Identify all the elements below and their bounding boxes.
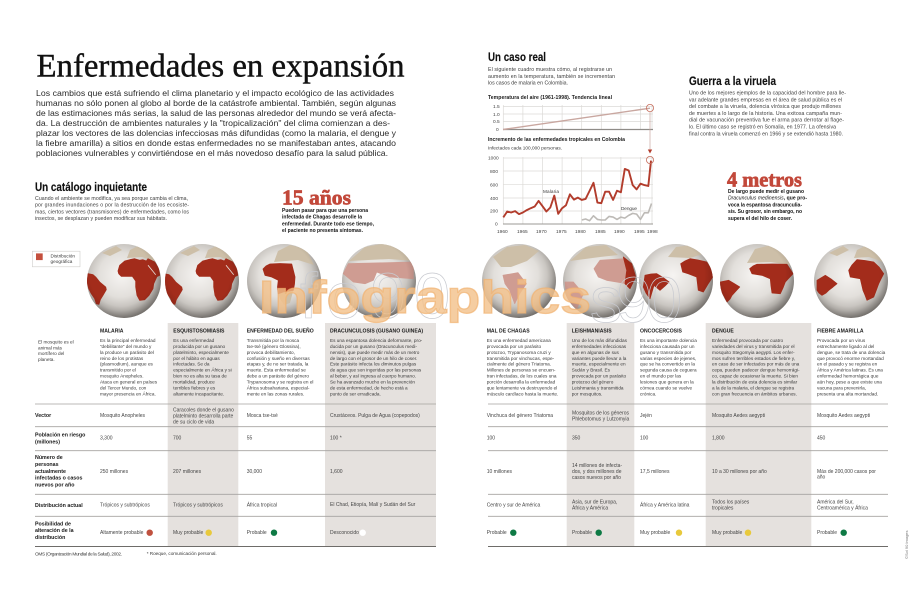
callout: 15 años: infectada de Chagas desarrolle la [282, 215, 362, 221]
row: distribución actual: Centroamérica y África [817, 504, 868, 512]
column: enfermedad del sueño: debe a un parásito del género [247, 374, 309, 379]
column: fiebre amarilla: vacuna para prevenirla, [817, 385, 866, 390]
column: dengue: DENGUE [712, 328, 734, 334]
column: mal de chagas [487, 328, 558, 396]
globe: dengue [720, 244, 794, 318]
column: esquistosomiasis [173, 328, 232, 396]
row: personas infectadas: año [817, 475, 826, 481]
text: caso real description: aumento en la temperatura, también se incrementan [488, 74, 615, 80]
column: mal de chagas: músculo cardíaco hasta la muerte. [487, 391, 558, 396]
chart: malaria y dengue: 1000 [488, 156, 499, 162]
chart: malaria y dengue: 1980 [575, 229, 586, 235]
column: enfermedad del sueño [247, 328, 314, 396]
column: enfermedad del sueño: Trypanosoma y se registra en el [247, 380, 313, 385]
row: personas infectadas [100, 463, 876, 481]
column: dracunculosis: de agua que son ingeridas por las personas [330, 368, 422, 373]
column: mal de chagas: transmitida por vinchucas, espe- [487, 356, 555, 361]
globe: leishmaniasis [563, 244, 637, 318]
callout: 4 metros: Dracunculus medinensis, que pro- [728, 196, 807, 202]
intro paragraph [36, 88, 397, 158]
column: malaria: MALARIA [100, 328, 124, 334]
row: personas infectadas: 30,000 [247, 469, 262, 475]
row: vector [100, 408, 870, 426]
column: malaria: mayor presencia en África. [100, 390, 156, 396]
chart: malaria y dengue: 1985 [595, 229, 606, 235]
arrow: temperature to disease peak [646, 104, 654, 164]
column: mal de chagas: Millones de personas se encuen- [487, 368, 556, 373]
row: posibilidad de alteración: Altamente probable [100, 530, 144, 536]
column: malaria: “debilitante” del mundo y [100, 344, 152, 349]
intro paragraph: poblaciones vulnerables y convirtiéndose en el más novedoso desafío para la salud pública. [36, 148, 388, 158]
callout: 15 años [282, 186, 375, 234]
row labels: distribución [35, 535, 65, 541]
row: posibilidad de alteración: Probable [247, 530, 267, 536]
column: note [38, 339, 74, 362]
text: viruela description: lo. El último caso se registró en Somalia, en 1977. La ofensiva [689, 124, 836, 130]
column: leishmaniasis: muerte, especialmente en [572, 362, 626, 367]
column: leishmaniasis: Sudán y Brasil. Es [572, 368, 611, 373]
column: malaria [100, 328, 158, 396]
column: dengue: a la de la malaria, el dengue se registra [712, 385, 794, 390]
chart: malaria y dengue [488, 156, 658, 235]
column: oncocercosis: Es una importante dolencia [640, 338, 697, 343]
column: malaria: Es la principal enfermedad [100, 338, 156, 343]
column: malaria: la produce un parásito del [100, 350, 154, 355]
row labels: Población en riesgo [35, 433, 86, 439]
column: oncocercosis: gusano y transmitida por [640, 350, 692, 355]
chart: malaria y dengue: Dengue [621, 206, 637, 211]
column: leishmaniasis: variantes puede llevar a la [572, 356, 627, 361]
chart: temperatura del aire: 1.0 [493, 112, 500, 118]
chart: malaria y dengue: 1975 [556, 229, 567, 235]
row: vector: Mosquito Anopheles [100, 413, 146, 419]
column: mal de chagas: porción desarrolla la enfermedad [487, 380, 556, 385]
text: catalog description: insectos, se desplazan y pueden modificar sus hábitats. [35, 216, 167, 222]
column: oncocercosis: infecciosa causada por un [640, 344, 695, 349]
column: leishmaniasis: Uno de los más difundidas [572, 338, 628, 343]
row: distribución actual: Asia, sur de Europa, [572, 500, 617, 506]
chart: malaria y dengue: 1995 [634, 229, 645, 235]
column: mal de chagas: cialmente del género Triatoma. [487, 362, 551, 367]
column: enfermedad del sueño: etapas y, de no ser tratada, la [247, 362, 309, 367]
column: dengue: Enfermedad provocada por cuatro [712, 338, 784, 343]
globe: esquistosomiasis [163, 244, 239, 318]
row: distribución actual: tropicales [712, 506, 734, 512]
text: viruela description: var adelante grandes empresas en el área de salud pública es el [689, 97, 842, 103]
column: malaria: mosquito Anopheles. [100, 374, 144, 379]
row: vector: Mosquitos de los géneros [572, 410, 629, 416]
chart: temperatura del aire: Temperatura del aire (1961-1998). Tendencia lineal [488, 95, 613, 101]
row labels: (millones) [35, 439, 60, 445]
column: dengue: en caso de ser infectados por más de una [712, 362, 800, 367]
row: población en riesgo: 450 [817, 435, 826, 441]
row: personas infectadas: 207 millones [173, 469, 202, 475]
text: catalog description: mas, ciertos vectores (transmisores) de enfermedades, como los [35, 209, 189, 215]
column: enfermedad del sueño: tse-tsé (género Glossina), [247, 344, 301, 349]
chart: malaria y dengue: 1970 [536, 229, 547, 235]
text: viruela description: dial de vacunación preventiva fue el arma para derrotar al flage- [689, 118, 844, 124]
column: enfermedad del sueño: mente en las zonas rurales. [247, 391, 304, 396]
callout: 4 metros: sis. Su grosor, sin embargo, no [728, 209, 802, 215]
chart: temperatura del aire: 0 [496, 127, 499, 133]
row labels: nuevos por año [35, 483, 75, 489]
column: enfermedad del sueño: muerte. Esta enfermedad se [247, 368, 306, 373]
text: caso real description: los casos de malaria en Colombia. [488, 81, 568, 87]
heading: chart incremento: Incremento de las enfermedades tropicales en Colombia [488, 137, 625, 143]
column: enfermedad del sueño: Transmitida por la mosca [247, 338, 300, 343]
table rules [35, 404, 888, 516]
column: esquistosomiasis: bien no es alta su tasa de [173, 374, 227, 379]
row: personas infectadas: dos, y dos millones de [572, 469, 622, 475]
column: leishmaniasis: enfermedades infecciosas [572, 344, 627, 349]
column: mal de chagas: tran infectadas, de los cuales una [487, 374, 557, 379]
row: vector: Mosca tse-tsé [247, 413, 278, 419]
row: posibilidad de alteración: Muy probable [712, 530, 743, 536]
column: oncocercosis: ONCOCERCOSIS [640, 328, 682, 334]
row: población en riesgo: 100 [640, 435, 649, 441]
row: personas infectadas: 10 a 30 millones por año [712, 469, 767, 475]
chart: temperatura del aire [488, 95, 653, 133]
row: distribución actual: Trópicos y subtrópicos [100, 502, 150, 508]
text: viruela description: final contra la viruela comenzó en 1966 y se extendió hasta 1980. [689, 131, 843, 137]
column: dracunculosis: de esta enfermedad, de hecho está a [330, 385, 408, 390]
row: población en riesgo: 1,800 [712, 435, 725, 441]
legend: distribución geográfica [32, 251, 80, 267]
row: vector: Phlebotomus y Lutzomyia [572, 416, 629, 422]
watermark: fo90 [300, 260, 450, 332]
row labels: Número de [35, 455, 63, 461]
heading: chart incremento [488, 137, 625, 151]
column: dracunculosis: al beber, y así ingresa al cuerpo humano. [330, 374, 416, 379]
column: fiebre amarilla: en el pasado y se registra en [817, 362, 878, 367]
row: posibilidad de alteración: Probable [572, 530, 592, 536]
column: esquistosomiasis: terribles fiebres y es [173, 385, 216, 390]
text: caso real description: El siguiente cuadro muestra cómo, al registrarse un [488, 67, 612, 73]
row: personas infectadas: Más de 200,000 casos por [817, 469, 876, 475]
column: dracunculosis [330, 328, 423, 396]
watermark [259, 260, 682, 336]
intro paragraph: da. La destrucción de ambientes naturales y la "tropicalización" del clima comienzan a des- [36, 118, 390, 128]
row: vector: Crustáceos. Pulga de Agua (copepodos) [330, 413, 420, 419]
column: fiebre amarilla: Provocada por un virus [817, 338, 866, 343]
chart: malaria y dengue: 600 [490, 182, 498, 188]
text: viruela description [689, 90, 846, 137]
column: fiebre amarilla: África y América latinas. Es una [817, 367, 883, 373]
column: mal de chagas: provocada por un parásito [487, 344, 542, 349]
globe: dracunculosis [342, 243, 416, 318]
column: mal de chagas: que lentamente va destruyendo el [487, 385, 557, 390]
chart: temperatura del aire: 1.5 [493, 104, 500, 110]
text: catalog description: por grandes inundaciones o por la destrucción de los ecosiste- [35, 203, 189, 209]
text: viruela description: Uno de los mejores ejemplos de la capacidad del hombre para lle- [689, 90, 846, 96]
row: vector: Jején [640, 413, 652, 419]
callout: 4 metros: supera el del hilo de coser. [728, 216, 793, 222]
column: dracunculosis: Se ha avanzado mucho en la prevención [330, 380, 415, 385]
column: oncocercosis: varias especies de jejenes, [640, 356, 696, 361]
column: dengue: variedades del virus y transmitida por el [712, 344, 795, 349]
column: dengue: mos sufren terribles estados de fiebre y, [712, 356, 795, 361]
globe: enfermedad del sueño [247, 244, 321, 318]
row: vector: platelminto desarrolla parte [173, 414, 234, 420]
column: mal de chagas: protozoo, Trypanosoma cruzi y [487, 350, 551, 355]
column: malaria: reino de los protistas [100, 356, 144, 361]
column: dracunculosis: ducida por un gusano (Dracunculus medi- [330, 344, 417, 349]
callout: 4 metros: voca la espantosa dracunculia- [728, 202, 802, 208]
column: enfermedad del sueño: provoca debilitamiento, [247, 350, 295, 355]
column: oncocercosis: córnea cuando se vuelve [640, 385, 693, 390]
row: vector: Vinchuca del género Triatoma [487, 413, 553, 419]
chart: temperatura del aire: 0.5 [493, 119, 500, 125]
column: note: mortífero del [38, 351, 64, 356]
column: fiebre amarilla: dengue, se trata de una dolencia [817, 350, 886, 355]
row: distribución actual [100, 500, 868, 512]
footnotes [35, 551, 217, 557]
text: catalog description: Cuando el ambiente se modifica, ya sea porque cambia el clima, [35, 196, 188, 202]
column: dengue [712, 328, 800, 396]
column: dengue: cepa, pueden padecer dengue hemorrági- [712, 368, 800, 373]
heading: Guerra a la viruela: Guerra a la viruela [689, 74, 776, 88]
row: distribución actual: Trópicos y subtrópicos [173, 502, 223, 508]
row labels: alteración de la [35, 528, 74, 534]
chart: malaria y dengue: Malaria [543, 189, 559, 194]
chart: malaria y dengue: 1965 [517, 229, 528, 235]
column: leishmaniasis: que en algunas de sus [572, 350, 620, 355]
globe: oncocercosis [639, 244, 713, 318]
callout: 4 metros: De largo puede medir el gusano [728, 189, 804, 195]
legend: distribución geográfica: geográfica [50, 259, 73, 264]
column: fiebre amarilla: presenta una alta mortandad. [817, 391, 878, 396]
column: esquistosomiasis: especialmente en África y si [173, 367, 232, 373]
column: enfermedad del sueño: confusión y sueño en diversas [247, 356, 310, 361]
chart: malaria y dengue: 1960 [497, 229, 508, 235]
column: fiebre amarilla [817, 328, 886, 396]
column: esquistosomiasis: por el hábito en aguas [173, 356, 220, 361]
heading: Un catálogo inquietante: Un catálogo inquietante [35, 180, 147, 194]
row: posibilidad de alteración: Desconocido [330, 530, 359, 536]
chart: malaria y dengue: 0 [495, 222, 498, 228]
callout: 15 años: el paciente no presenta síntomas. [282, 228, 364, 234]
text: viruela description: de muertes a lo largo de la historia. Una exitosa campaña mun- [689, 111, 842, 117]
column: dracunculosis: de largo con el grosor de un hilo de coser. [330, 356, 417, 361]
footnotes: OMS (Organización Mundial de la Salud), 2002. [35, 552, 122, 557]
row: personas infectadas: 250 millones [100, 469, 129, 475]
row: vector: Caracoles donde el gusano [173, 408, 234, 414]
column: enfermedad del sueño: África subsahariana, especial- [247, 384, 310, 390]
row labels: Posibilidad de [35, 522, 71, 528]
column: dracunculosis: Es una espantosa dolencia deformante, pro- [330, 338, 423, 343]
column: leishmaniasis [572, 328, 628, 396]
row: posibilidad de alteración: Muy probable [173, 530, 204, 536]
row: personas infectadas: 10 millones [487, 469, 512, 475]
column: leishmaniasis: por mosquitos. [572, 391, 602, 396]
column: dracunculosis: Este parásito infecta los diminutos pulgas [330, 362, 417, 367]
column: fiebre amarilla: estrechamente ligado al del [817, 344, 874, 349]
chart: malaria y dengue: 1990 [614, 229, 625, 235]
globe: fiebre amarilla [814, 244, 888, 318]
row: población en riesgo: 55 [247, 435, 252, 441]
heading: Un caso real: Un caso real [488, 50, 546, 64]
column: dracunculosis: DRACUNCULOSIS (GUSANO GUINEA) [330, 328, 423, 334]
row labels: Distribución actual [35, 503, 83, 509]
column: oncocercosis: crónica. [640, 391, 656, 396]
row: distribución actual: El Chad, Etiopía, Malí y Sudán del Sur [330, 502, 416, 508]
row: población en riesgo: 700 [173, 435, 182, 441]
column: dengue: mosquito Stegomyia aegypti. Los enfer- [712, 350, 795, 355]
column: oncocercosis [640, 328, 697, 396]
row: posibilidad de alteración: Probable [817, 530, 837, 536]
column: esquistosomiasis: platelminto, especialmente [173, 350, 229, 355]
text: viruela description: del combate a la viruela, dolencia vírósica que produjo millones [689, 104, 841, 110]
row: personas infectadas: casos nuevos por año [572, 475, 621, 481]
column: malaria: (plasmodium), aunque es [100, 362, 154, 367]
chart: malaria y dengue: 800 [490, 169, 498, 175]
row: vector: Mosquito Aedes aegypti [817, 413, 870, 419]
row: posibilidad de alteración: Muy probable [640, 530, 671, 536]
callout: 4 metros [727, 168, 807, 222]
row: posibilidad de alteración: Probable [487, 530, 507, 536]
column: dengue: co, capaz de ocasionar la muerte. Si bien [712, 374, 798, 379]
column: esquistosomiasis: altamente incapacitante. [173, 391, 224, 396]
column: esquistosomiasis: mortalidad, produce [173, 380, 215, 385]
text: catalog description [35, 196, 189, 222]
column: dengue: con gran frecuencia en ámbitos urbanos. [712, 391, 797, 396]
watermark: s90 [590, 264, 682, 336]
row: posibilidad de alteración [100, 530, 847, 536]
column: malaria: Ataca en general en países [100, 380, 158, 385]
row labels: personas [35, 462, 59, 468]
column: leishmaniasis: Leishmania y transmitida [572, 385, 624, 390]
intro paragraph: la fiebre amarilla) a sitios en donde estas enfermedades no se manifestaban antes, atacando [36, 138, 396, 148]
column: malaria: transmitido por el [100, 368, 136, 373]
column: note: El mosquito es el [38, 339, 74, 344]
callout: 15 años: enfermedad. Durante todo ese tiempo, [282, 221, 375, 227]
legend: distribución geográfica: Distribución [50, 253, 75, 258]
row: distribución actual: África y América [572, 504, 608, 512]
shaded table columns [168, 323, 811, 547]
credit: ©Sol 90 Images [904, 530, 909, 559]
column: esquistosomiasis: infectadas. Se da [173, 362, 210, 367]
column: note: animal más [38, 345, 63, 350]
title: Enfermedades en expansión [36, 48, 404, 84]
heading: chart incremento: Infectados cada 100,000 personas. [488, 146, 562, 151]
text: caso real description [488, 67, 615, 87]
chart: malaria y dengue: 200 [490, 208, 498, 214]
column: fiebre amarilla: enfermedad hemorrágica que [817, 374, 879, 379]
row: vector: de su ciclo de vida [173, 420, 214, 426]
column: enfermedad del sueño: ENFERMEDAD DEL SUEÑO [247, 328, 314, 334]
column: esquistosomiasis: ESQUISTOSOMIASIS [173, 328, 225, 334]
callout: 15 años: 15 años [282, 186, 351, 210]
globe: malaria [87, 244, 161, 318]
row: personas infectadas: 1,600 [330, 469, 343, 475]
column: oncocercosis: en el mundo por las [640, 374, 682, 379]
column: oncocercosis: segunda causa de ceguera [640, 368, 697, 373]
column: oncocercosis: lesiones que genera en la [640, 380, 694, 385]
row: población en riesgo: 3,300 [100, 435, 113, 441]
chart: malaria y dengue: 1998 [647, 229, 658, 235]
column: fiebre amarilla: que provocó enorme mortandad [817, 356, 884, 361]
row: población en riesgo [100, 435, 826, 441]
column: oncocercosis: que se ha convertido en la [640, 362, 695, 367]
row labels [35, 413, 86, 541]
footnotes: * Roeque, comunicación personal. [147, 551, 217, 556]
intro paragraph: de las estimaciones más serias, la salud de las personas alrededor del mundo se verá afecta- [36, 108, 396, 118]
row labels: actualmente [35, 469, 66, 475]
row: personas infectadas: 14 millones de infecta- [572, 463, 622, 469]
column: leishmaniasis: protozoo del género [572, 380, 614, 385]
intro paragraph: plazar los vectores de las dolencias infecciosas más difundidas (como la malaria, el dengue y [36, 128, 397, 138]
column: mal de chagas: MAL DE CHAGAS [487, 328, 530, 334]
column: dracunculosis: nensis), que puede medir más de un metro [330, 350, 420, 355]
row: distribución actual: Todos los países [712, 500, 750, 506]
chart: malaria y dengue: 400 [490, 196, 498, 202]
column: malaria: del Tercer Mundo, con [100, 385, 147, 390]
row: población en riesgo: 100 * [330, 435, 342, 441]
watermark: Infographics [259, 271, 591, 323]
callout: 4 metros: 4 metros [727, 168, 802, 192]
column: fiebre amarilla: FIEBRE AMARILLA [817, 328, 864, 334]
intro paragraph: humanas no sólo ponen al globo al borde de la catástrofe ambiental. También, según algunas [36, 98, 397, 108]
row labels: Vector [35, 413, 51, 419]
column: mal de chagas: Es una enfermedad americana [487, 338, 551, 343]
column: note: planeta. [38, 357, 55, 362]
row: distribución actual: África y América latina [640, 502, 690, 508]
row: distribución actual: África tropical [247, 502, 277, 508]
row: personas infectadas: 17,5 millones [640, 469, 670, 475]
callout: 15 años: Pueden pasar para que una persona [282, 208, 368, 214]
row: vector: Mosquito Aedes aegypti [712, 413, 765, 419]
intro paragraph: Los cambios que está sufriendo el clima planetario y el impacto ecológico de las actividades [36, 88, 395, 98]
column: esquistosomiasis: producida por un gusano [173, 344, 226, 349]
globe: mal de chagas [482, 244, 556, 318]
column: leishmaniasis: LEISHMANIASIS [572, 328, 612, 334]
row: población en riesgo: 350 [572, 435, 581, 441]
column: leishmaniasis: provocada por un parásito [572, 374, 627, 379]
row: distribución actual: América del Sur, [817, 500, 854, 506]
row: distribución actual: Centro y sur de América [487, 502, 541, 508]
column: esquistosomiasis: Es una enfermedad [173, 338, 215, 343]
column: fiebre amarilla: aún hoy, pese a que existe una [817, 380, 882, 385]
column: dengue: la distribución de esta dolencia es similar [712, 380, 798, 385]
row labels: infectadas o casos [35, 476, 82, 482]
row: población en riesgo: 100 [487, 435, 495, 441]
column: dracunculosis: punto de ser erradicada. [330, 391, 381, 396]
